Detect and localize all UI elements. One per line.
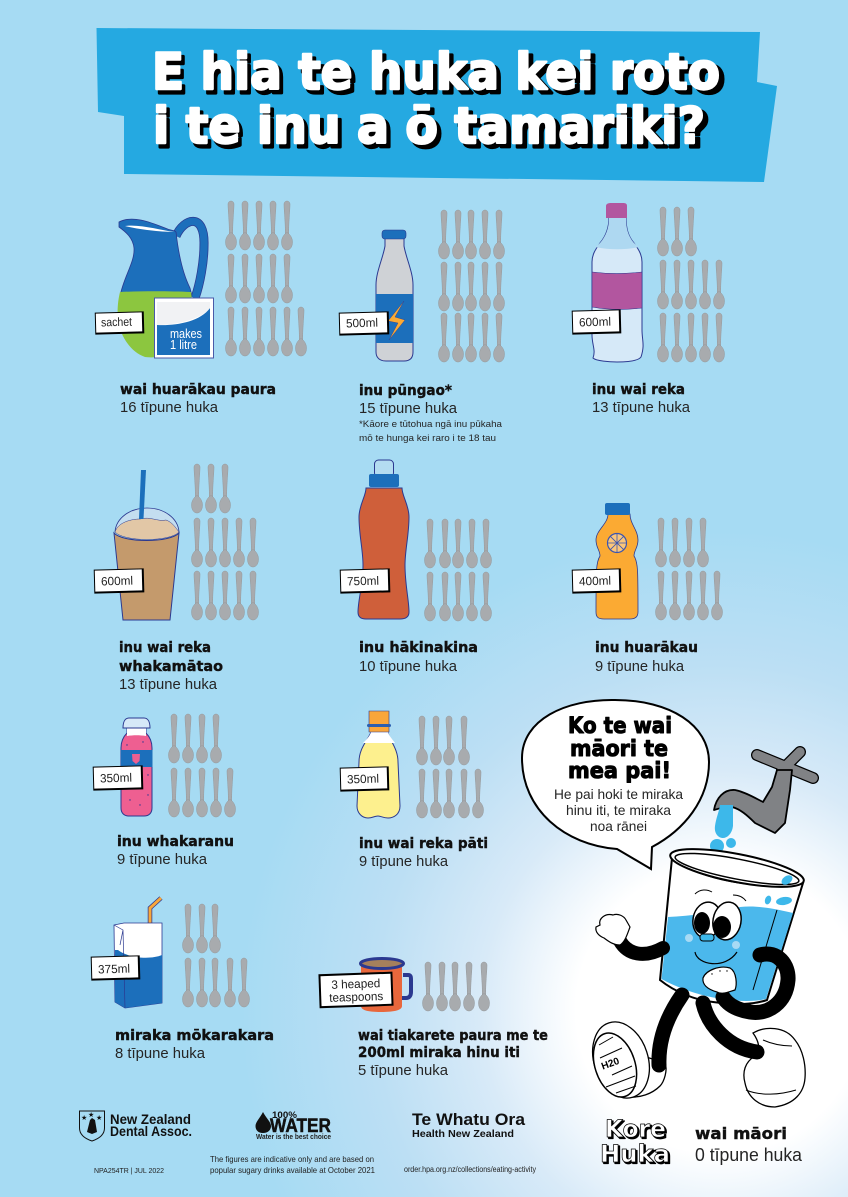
footer: disclaimer: The figures are indicative only and are based on	[210, 1154, 374, 1164]
logo: 100% water: Water is the best choice	[256, 1134, 331, 1141]
callout: speech bubble: noa rānei	[590, 818, 647, 834]
logo: New Zealand Dental Association: ★	[96, 1114, 102, 1122]
panel: hot chocolate	[318, 958, 548, 1079]
footer: publication code: NPA254TR | JUL 2022	[94, 1166, 164, 1175]
panel: sweet fizzy drink	[340, 711, 488, 870]
caption: sweet fizzy drink	[359, 836, 488, 870]
caption: energy drink with footnote	[359, 383, 503, 444]
label: 3 heaped teaspoons	[318, 972, 394, 1008]
caption: iced drink	[119, 640, 223, 693]
caption: fruit drink: inu huarākau	[595, 640, 698, 656]
caption: hot chocolate: wai tiakarete paura me te	[358, 1028, 548, 1044]
caption: soft drink: 13 tīpune huka	[592, 399, 691, 416]
icon: soft drink bottle	[592, 203, 643, 362]
logo: 100% water	[256, 1110, 331, 1141]
caption: energy drink with footnote: inu pūngao*	[359, 383, 453, 399]
label: 400ml	[572, 568, 621, 594]
icon: jug with sachet: 1 litre	[170, 337, 197, 352]
arms	[596, 914, 788, 1012]
label: 3 heaped teaspoons: teaspoons	[329, 989, 383, 1005]
caption: hot chocolate	[358, 1028, 548, 1079]
panel: smoothie	[93, 714, 236, 868]
caption: iced drink: whakamātao	[119, 659, 223, 675]
label: sachet: sachet	[101, 315, 133, 329]
sugar free stamp: Kore	[605, 1115, 666, 1143]
caption: powdered fruit drink: 16 tīpune huka	[120, 399, 219, 416]
title: E hia te huka kei roto	[155, 47, 725, 105]
icon: yellow bottle	[357, 711, 400, 818]
footer: website: order.hpa.org.nz/collections/eating-activity	[404, 1165, 536, 1174]
label: 400ml: 400ml	[579, 574, 611, 588]
label: 600ml: 600ml	[579, 315, 611, 329]
title: i te inu a ō tamariki?	[156, 101, 710, 159]
title: E hia te huka kei roto	[152, 43, 720, 101]
spoons: 9 teaspoons	[168, 714, 236, 817]
icon: jug with sachet: makes	[170, 326, 202, 341]
spoons: 13 teaspoons	[658, 207, 724, 362]
logo: 100% water: WATER	[270, 1116, 331, 1137]
left foot with H20 sole	[583, 995, 682, 1105]
caption: iced drink: inu wai reka	[119, 640, 211, 656]
icon: smoothie bottle	[121, 718, 152, 816]
logo: New Zealand Dental Association: New Zealand	[110, 1111, 191, 1127]
spoons: 15 teaspoons	[438, 210, 504, 362]
spoons: 13 teaspoons	[192, 464, 258, 620]
panel: soft drink	[572, 203, 724, 416]
glass body	[660, 841, 806, 1004]
caption: fruit drink: 9 tīpune huka	[595, 658, 685, 675]
icon: tap with water	[710, 752, 813, 853]
caption: energy drink with footnote: mō te hunga kei raro i te 18 tau	[359, 433, 496, 444]
icon: orange juice bottle	[596, 503, 638, 619]
caption: energy drink with footnote: 15 tīpune huka	[359, 400, 458, 417]
label: 600ml: 600ml	[101, 574, 133, 588]
caption: water	[695, 1124, 803, 1165]
callout: speech bubble: Ko te wai	[568, 714, 672, 739]
caption: smoothie	[117, 834, 234, 868]
callout: speech bubble	[522, 700, 709, 869]
label: 375ml	[91, 955, 140, 981]
right foot	[703, 1003, 805, 1107]
icon: energy drink bottle	[376, 230, 413, 361]
spoons: 5 teaspoons	[422, 962, 490, 1011]
caption: smoothie: 9 tīpune huka	[117, 851, 208, 868]
logo: New Zealand Dental Association: ★	[88, 1111, 94, 1119]
label: 500ml: 500ml	[346, 316, 378, 330]
character: walking water glass	[583, 841, 806, 1107]
label: 350ml	[93, 765, 143, 791]
spoons: 9 teaspoons	[416, 716, 484, 818]
face	[685, 890, 746, 964]
caption: sweet fizzy drink: inu wai reka pāti	[359, 836, 488, 852]
logo: New Zealand Dental Association	[80, 1111, 192, 1141]
icon: iced cup with straw	[114, 470, 179, 620]
panel: energy drink	[339, 210, 504, 444]
caption: powdered fruit drink: wai huarākau paura	[120, 382, 276, 398]
spoons: 8 teaspoons	[182, 904, 250, 1007]
caption: flavoured milk: 8 tīpune huka	[115, 1045, 206, 1062]
logo: 100% water: 100%	[272, 1110, 297, 1120]
icon: milk carton	[114, 898, 162, 1008]
callout: speech bubble: māori te	[570, 737, 668, 762]
title	[152, 43, 725, 159]
sugar free stamp	[600, 1115, 672, 1170]
panel: flavoured milk	[91, 898, 274, 1062]
callout: speech bubble: He pai hoki te miraka	[554, 786, 683, 802]
footer: disclaimer: popular sugary drinks available at October 2021	[210, 1165, 375, 1175]
logo: New Zealand Dental Association: Dental Assoc.	[110, 1123, 192, 1139]
sugar free stamp: Kore	[606, 1116, 668, 1144]
caption: hot chocolate: 5 tīpune huka	[358, 1062, 449, 1079]
caption: flavoured milk	[115, 1028, 274, 1062]
left foot with H20 sole: H20	[600, 1056, 621, 1073]
caption: iced drink: 13 tīpune huka	[119, 676, 218, 693]
label: 600ml	[94, 568, 144, 594]
logo: Te Whatu Ora: Te Whatu Ora	[412, 1110, 526, 1129]
caption: sweet fizzy drink: 9 tīpune huka	[359, 853, 449, 870]
caption: flavoured milk: miraka mōkarakara	[115, 1028, 274, 1044]
icon: mug	[360, 958, 411, 1012]
panel: sports drink	[340, 460, 492, 675]
caption: sports drink: inu hākinakina	[359, 640, 478, 656]
caption: soft drink	[592, 382, 691, 416]
caption: sports drink: 10 tīpune huka	[359, 658, 458, 675]
footer: disclaimer	[210, 1154, 375, 1175]
label: 350ml	[340, 766, 389, 792]
title: i te inu a ō tamariki?	[153, 97, 705, 155]
caption: fruit drink	[595, 640, 698, 675]
caption: water: 0 tīpune huka	[695, 1145, 803, 1165]
label: 3 heaped teaspoons: 3 heaped	[331, 976, 381, 992]
label: 750ml: 750ml	[347, 574, 379, 588]
label: 600ml	[572, 309, 621, 335]
label: 350ml: 350ml	[347, 772, 379, 786]
callout: speech bubble: hinu iti, te miraka	[566, 802, 671, 818]
label: 750ml	[340, 568, 390, 594]
panel: fruit drink	[572, 503, 722, 675]
label: 375ml: 375ml	[98, 962, 130, 976]
label: 350ml: 350ml	[100, 771, 132, 785]
label: sachet	[95, 311, 144, 335]
caption: sports drink	[359, 640, 478, 675]
spoons: 9 teaspoons	[656, 518, 722, 620]
icon: sports bottle	[358, 460, 409, 619]
callout: speech bubble: mea pai!	[568, 759, 671, 784]
label: 500ml	[339, 311, 389, 336]
caption: hot chocolate: 200ml miraka hinu iti	[358, 1045, 520, 1061]
caption: smoothie: inu whakaranu	[117, 834, 234, 850]
sugar free stamp: Huka	[600, 1140, 670, 1168]
title banner	[96, 28, 777, 182]
logo: New Zealand Dental Association: ★	[81, 1114, 87, 1122]
icon: jug with sachet	[118, 219, 214, 358]
caption: energy drink with footnote: *Kāore e tūtohua ngā inu pūkaha	[359, 419, 503, 430]
panel: iced drink	[94, 464, 258, 693]
panel: powdered fruit drink	[95, 201, 306, 416]
caption: soft drink: inu wai reka	[592, 382, 685, 398]
logo: Te Whatu Ora: Health New Zealand	[412, 1128, 514, 1140]
caption: powdered fruit drink	[120, 382, 276, 416]
logo: Te Whatu Ora	[412, 1110, 526, 1140]
spoons: 16 teaspoons	[226, 201, 306, 356]
sugar free stamp: Huka	[602, 1142, 672, 1170]
spoons: 10 teaspoons	[424, 519, 492, 621]
caption: water: wai māori	[695, 1124, 787, 1143]
